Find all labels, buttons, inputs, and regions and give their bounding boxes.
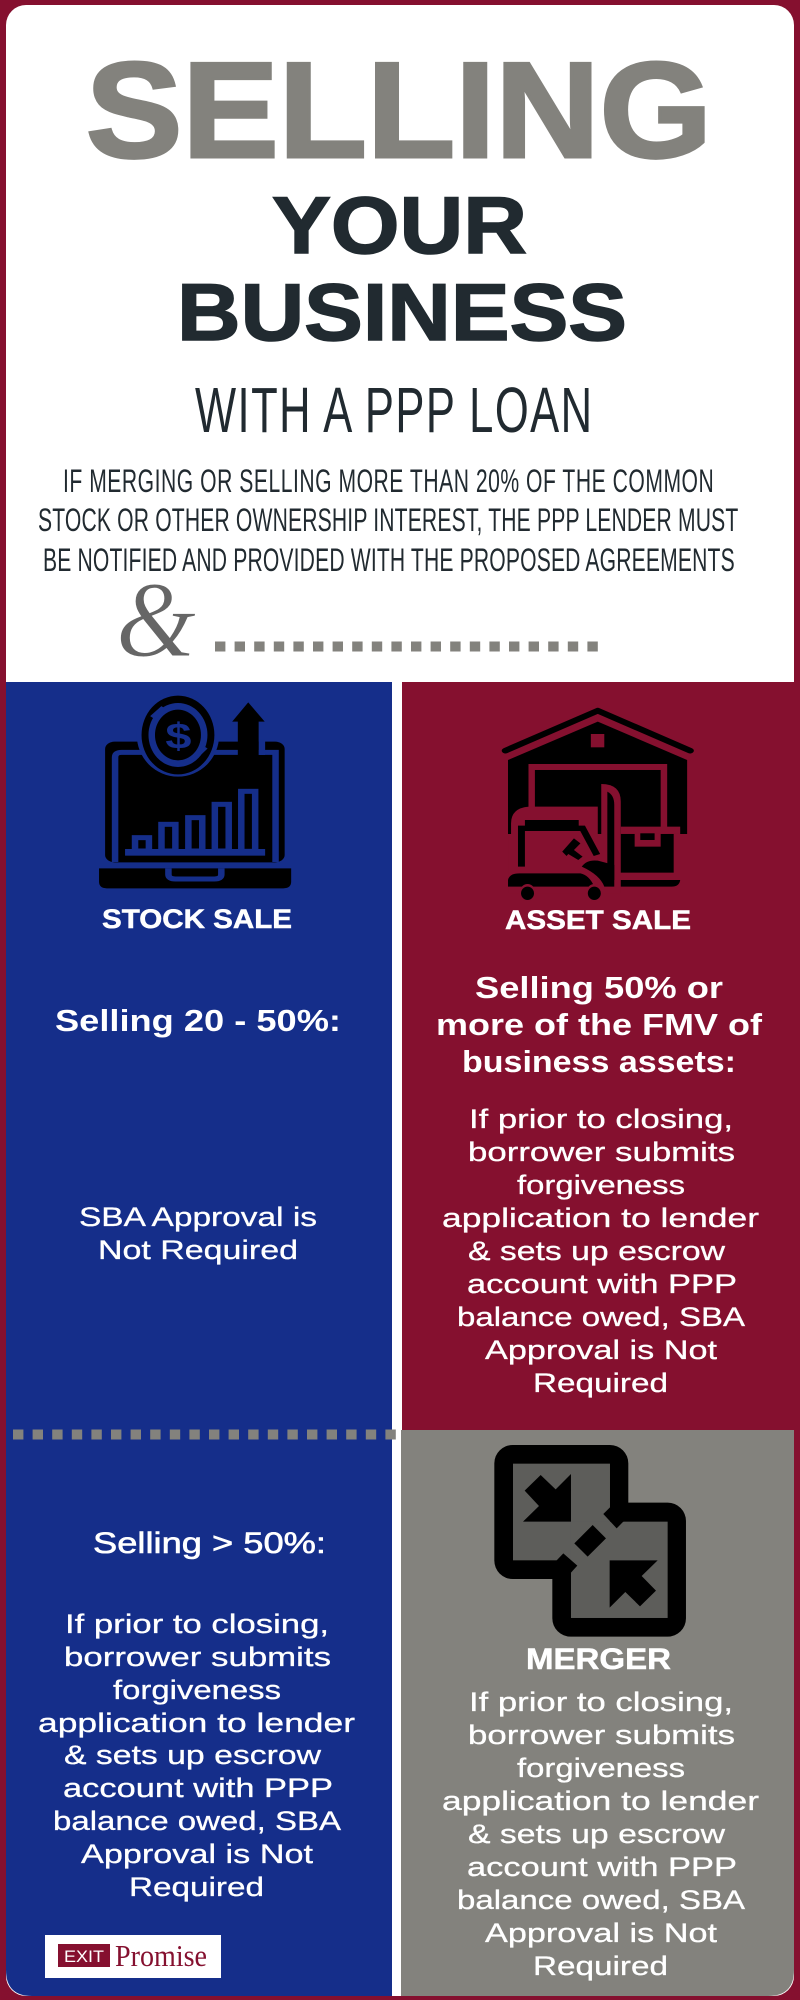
text: asset sale conditions: If prior to closing, [469,1104,733,1134]
text: asset sale conditions: borrower submits [468,1137,735,1167]
text: sba approval not required: SBA Approval is [79,1202,317,1232]
text: sba approval not required [79,1202,317,1265]
text: asset sale conditions: application to lender [442,1203,759,1233]
panel: merger [401,1430,794,1996]
panel: asset sale [402,682,794,1430]
text: stock sale over 50% conditions: balance owed, SBA [53,1806,341,1836]
icon: laptop with rising chart [99,693,291,888]
text: merger conditions: balance owed, SBA [457,1885,745,1915]
title: selling: SELLING [86,34,712,186]
subheading: selling 20 - 50%: Selling 20 - 50%: [55,1003,341,1038]
text: stock sale over 50% conditions [38,1609,355,1902]
text: merger conditions: application to lender [442,1786,759,1816]
text: stock sale over 50% conditions: forgiveness [113,1675,281,1705]
subheading: selling 50% or more of fmv: business assets: [462,1044,736,1079]
heading: stock sale: STOCK SALE [102,904,292,934]
logo: exit promise [45,1935,221,1978]
text: stock sale over 50% conditions: & sets up escrow [64,1740,322,1770]
text: asset sale conditions: Approval is Not [485,1335,718,1365]
text: merger conditions: borrower submits [468,1720,735,1750]
intro text block: IF MERGING OR SELLING MORE THAN 20% OF THE COMMON [63,462,714,499]
icon: merging squares [494,1445,686,1637]
text: merger conditions: account with PPP [467,1852,737,1882]
intro text block: BE NOTIFIED AND PROVIDED WITH THE PROPOSED AGREEMENTS [43,541,735,578]
text: merger conditions: Required [533,1951,668,1981]
intro text block: STOCK OR OTHER OWNERSHIP INTEREST, THE PPP LENDER MUST [38,501,738,538]
title: your: YOUR [272,181,527,271]
intro text block [38,462,738,578]
text: stock sale over 50% conditions: application to lender [38,1708,355,1738]
text: stock sale over 50% conditions: account with PPP [63,1773,333,1803]
text: stock sale over 50% conditions: If prior to closing, [65,1609,329,1639]
text: merger conditions: If prior to closing, [469,1687,733,1717]
text: asset sale conditions: & sets up escrow [468,1236,726,1266]
title: business: BUSINESS [177,268,627,358]
logo: exit promise: EXIT [64,1947,104,1966]
text: asset sale conditions [442,1104,759,1398]
panel: stock sale [6,682,392,1996]
text: stock sale over 50% conditions: Required [129,1872,264,1902]
text: asset sale conditions: Required [533,1368,668,1398]
text: stock sale over 50% conditions: borrower submits [64,1642,331,1672]
icon: warehouse with forklift [505,711,690,901]
ampersand: & [116,561,196,680]
subtitle: WITH A PPP LOAN [195,374,592,446]
text: asset sale conditions: forgiveness [517,1170,685,1200]
text: stock sale over 50% conditions: Approval is Not [81,1839,314,1869]
logo: exit promise: Promise [115,1938,207,1973]
subheading: selling 50% or more of fmv: Selling 50% or [475,970,723,1005]
text: asset sale conditions: account with PPP [467,1269,737,1299]
text: asset sale conditions: balance owed, SBA [457,1302,745,1332]
text: merger conditions: forgiveness [517,1753,685,1783]
text: sba approval not required: Not Required [98,1235,298,1265]
subheading: selling 50% or more of fmv: more of the FMV of [436,1007,763,1042]
heading: asset sale: ASSET SALE [505,905,691,935]
heading: merger: MERGER [526,1643,671,1676]
text: merger conditions: & sets up escrow [468,1819,726,1849]
subheading: selling over 50%: Selling > 50%: [93,1527,326,1560]
subheading: selling 50% or more of fmv [436,970,763,1079]
text: merger conditions [442,1687,759,1981]
icon: laptop with rising chart: $ [165,716,191,756]
text: merger conditions: Approval is Not [485,1918,718,1948]
